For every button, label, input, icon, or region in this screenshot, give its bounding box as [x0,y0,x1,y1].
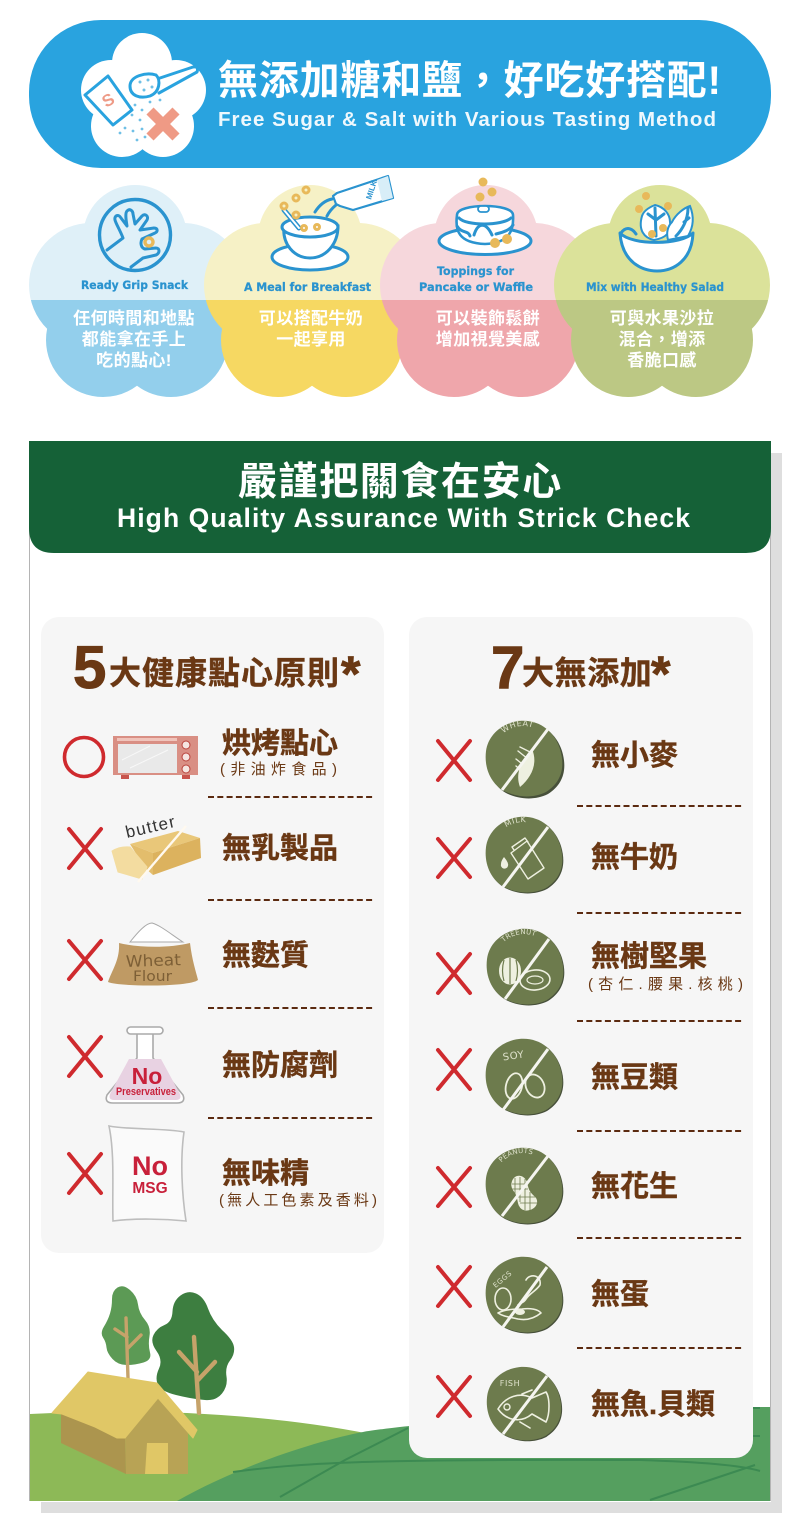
icon: cross wheat [438,741,470,780]
text: no treenut: 無樹堅果 [591,940,707,973]
text: pancake description: 增加視覺美感 [436,329,540,349]
text: no wheat: 無小麥 [591,739,678,772]
text: no treenut [588,940,743,993]
icon: sugar and salt crossed out: S [99,89,118,111]
icon: cross peanuts [438,1168,470,1206]
icon: cereal bowl and milk bottle [272,176,393,270]
icon: cross gluten [69,941,101,979]
panel: quality assurance card [29,441,782,1513]
text: breakfast description: 可以搭配牛奶 [259,308,363,328]
text: no fish: 無魚.貝類 [591,1388,715,1421]
icon: cross preservatives [69,1037,101,1076]
heading: seven no additives: * [651,646,671,702]
text: no eggs: 無蛋 [591,1278,649,1311]
text: no milk: 無牛奶 [591,841,678,874]
icon: no peanuts: PEANUTS [498,1148,533,1162]
icon: wheat flour sack: Flour [133,969,172,985]
text: no preservatives: 無防腐劑 [222,1049,338,1082]
text: no msg: (無人工色素及香料) [219,1192,377,1209]
label: ready grip snack: Ready Grip Snack [81,278,188,292]
heading: five principles [73,634,361,702]
text: salad description: 混合，增添 [618,329,706,349]
icon: wheat flour sack [108,923,198,986]
text: breakfast description: 一起享用 [276,329,346,349]
heading: seven no additives [491,634,671,702]
label: toppings for pancake or waffle: Pancake or Waffle [419,280,533,294]
icon: cross eggs [438,1267,470,1306]
icon: no fish: FISH [500,1379,520,1388]
heading: five principles: 大健康點心原則 [109,655,340,691]
text: no dairy: 無乳製品 [222,832,338,865]
text: salad description: 香脆口感 [627,350,697,370]
label: a meal for breakfast: A Meal for Breakfast [244,280,371,294]
icon: cross milk [438,839,470,877]
icon: flask no preservatives: No [132,1063,162,1089]
icon: wheat flour sack: Wheat [125,950,181,971]
panel: mix with salad [554,185,770,397]
icon: cross soy [438,1050,470,1089]
icon: cross msg [69,1154,101,1193]
icon: no soy [486,1039,563,1115]
panel: seven no additives [409,617,753,1458]
text: no treenut: (杏仁.腰果.核桃) [588,976,743,993]
icon: butter [112,812,201,882]
heading: assurance title: 嚴謹把關食在安心 [238,461,563,504]
heading: seven no additives: 7 [491,634,524,701]
text: snack description: 吃的點心! [96,351,172,370]
icon: no peanuts [486,1148,564,1224]
icon: no treenut [486,928,564,1006]
illustration: tree left [102,1286,150,1378]
panel: ready grip snack [29,185,245,397]
icon: hand holding cereal [100,200,170,270]
panel: toppings for pancake [380,178,596,397]
text: salad description [610,308,714,370]
illustration: green hills and farmhouse [29,1286,771,1501]
text: pancake description [436,308,540,349]
icon: no wheat [486,720,564,798]
icon: pancakes with cereal toppings [439,178,531,254]
text: no soy: 無豆類 [591,1061,678,1094]
text: snack description: 任何時間和地點 [73,309,195,328]
icon: no soy: SOY [502,1050,525,1063]
icon: sugar and salt crossed out [81,33,206,157]
illustration: tree right [152,1292,234,1413]
heading: five principles: 5 [73,634,106,701]
text: no msg: 無味精 [222,1157,309,1190]
icon: flask no preservatives: Preservatives [116,1086,176,1098]
icon: no eggs: EGGS [492,1269,514,1290]
text: snack description [73,309,195,370]
icon: no milk [486,816,564,894]
icon: cross fish [438,1377,470,1416]
label: toppings for pancake or waffle: Toppings for [437,264,514,278]
heading: seven no additives: 大無添加 [522,655,652,691]
icon: cereal bowl and milk bottle: MILK [364,179,379,201]
icon: msg bag: No [132,1151,168,1181]
text: no gluten: 無麩質 [222,939,309,972]
text: breakfast description [259,308,363,349]
heading: banner title: 無添加糖和鹽，好吃好搭配! [218,59,722,103]
icon: butter: butter [124,812,177,842]
label: toppings for pancake or waffle [419,264,533,294]
icon: red circle [64,738,104,776]
panel: five healthy snack principles [41,617,384,1253]
icon: no eggs [486,1257,563,1333]
heading: assurance subtitle: High Quality Assurance With Strick Check [117,503,690,533]
text: baked snack: 烘烤點心 [222,727,338,760]
illustration: farmhouse [52,1372,197,1474]
icon: no milk: MILK [504,816,526,827]
text: snack description: 都能拿在手上 [82,329,186,349]
icon: no fish [487,1367,562,1441]
header: green title bar [29,441,771,553]
icon: msg bag [109,1126,186,1221]
panel: top banner [29,20,771,168]
icon: flask no preservatives [106,1027,184,1103]
text: no peanuts: 無花生 [591,1170,678,1203]
label: mix with healthy salad: Mix with Healthy Salad [586,280,724,294]
heading: five principles: * [341,646,361,702]
text: baked snack [220,727,338,778]
text: no msg [219,1157,377,1209]
icon: no wheat: WHEAT [500,720,534,732]
text: pancake description: 可以裝飾鬆餅 [436,308,540,328]
icon: msg bag: MSG [132,1180,168,1197]
text: baked snack: (非油炸食品) [220,761,337,778]
icon: cross treenut [438,954,470,993]
icon: oven [113,736,198,779]
text: salad description: 可與水果沙拉 [610,308,714,328]
icon: cross dairy [69,829,101,868]
icon: salad bowl [620,192,693,271]
icon: no treenut: TREENUT [500,928,537,941]
panel: meal for breakfast [204,176,420,397]
heading: banner subtitle: Free Sugar & Salt with Various Tasting Method [218,108,716,131]
